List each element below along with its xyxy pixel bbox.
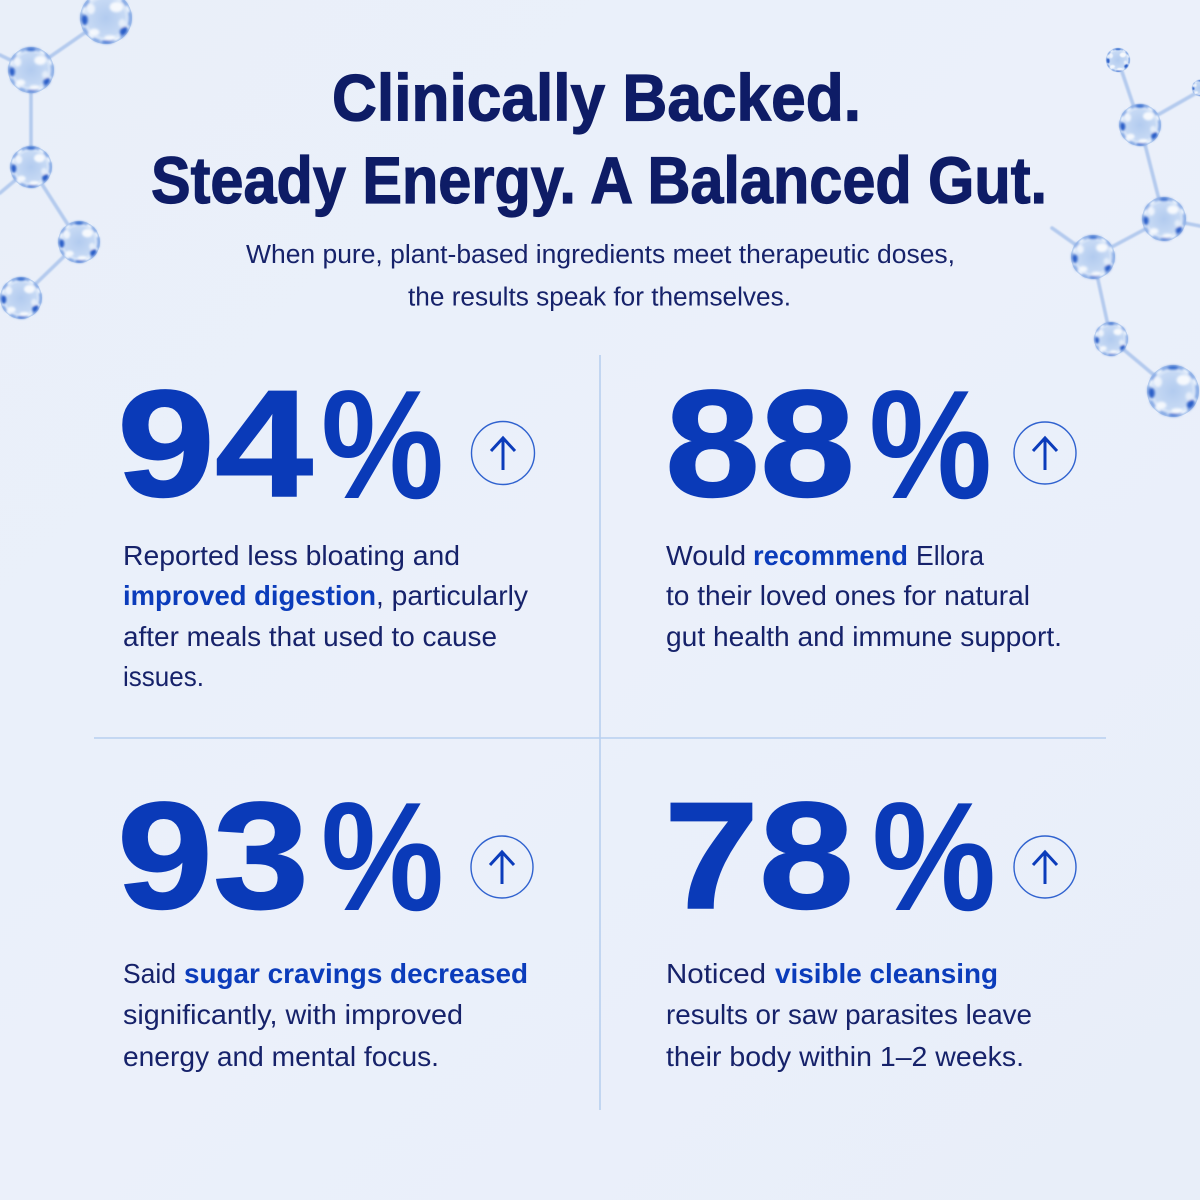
icon: up arrow bbox=[1014, 836, 1076, 898]
description: Would bbox=[666, 540, 746, 571]
description: Noticed bbox=[666, 958, 766, 989]
description: recommend bbox=[753, 540, 908, 571]
vertical divider bbox=[599, 355, 601, 1110]
description: after meals that used to cause bbox=[123, 621, 497, 652]
stat number bbox=[117, 770, 444, 943]
stat number bbox=[664, 770, 996, 943]
description bbox=[666, 958, 1032, 1072]
description bbox=[666, 540, 1062, 652]
title: Clinically Backed. bbox=[332, 60, 861, 134]
subtitle: When pure, plant-based ingredients meet therapeutic doses, bbox=[246, 241, 955, 269]
icon: molecule top left bbox=[0, 0, 132, 319]
icon: up arrow bbox=[471, 836, 533, 898]
stat number: 88 bbox=[665, 359, 855, 529]
stat number bbox=[117, 358, 444, 531]
stat number: 93 bbox=[117, 771, 309, 941]
title bbox=[151, 60, 1047, 217]
description: significantly, with improved bbox=[123, 999, 463, 1030]
description: visible cleansing bbox=[775, 958, 998, 989]
stat number: % bbox=[872, 770, 996, 943]
description: their body within 1–2 weeks. bbox=[666, 1041, 1024, 1072]
icon: up arrow bbox=[1014, 422, 1076, 484]
horizontal divider bbox=[94, 737, 1106, 739]
stat number: % bbox=[869, 358, 992, 531]
description: energy and mental focus. bbox=[123, 1041, 439, 1072]
description: to their loved ones for natural bbox=[666, 580, 1030, 611]
stat number: % bbox=[321, 770, 444, 943]
subtitle bbox=[246, 241, 955, 312]
title: Steady Energy. A Balanced Gut. bbox=[151, 143, 1047, 217]
description: issues. bbox=[123, 661, 204, 692]
stat number: % bbox=[321, 358, 444, 531]
description: sugar cravings decreased bbox=[184, 958, 528, 989]
panel: 94 percent stat bbox=[117, 358, 534, 692]
description: Reported less bloating and bbox=[123, 540, 460, 571]
description: , particularly bbox=[376, 580, 528, 611]
panel: 93 percent stat bbox=[117, 770, 533, 1072]
description: Said bbox=[123, 958, 176, 989]
description: improved digestion bbox=[123, 580, 376, 611]
stat number: 94 bbox=[117, 359, 313, 529]
stat number: 78 bbox=[664, 771, 854, 941]
icon: up arrow bbox=[472, 422, 534, 484]
description bbox=[123, 958, 528, 1072]
subtitle: the results speak for themselves. bbox=[408, 284, 791, 312]
description: gut health and immune support. bbox=[666, 621, 1062, 652]
panel: 88 percent stat bbox=[665, 358, 1076, 652]
icon: molecule right bbox=[1052, 48, 1200, 417]
panel: 78 percent stat bbox=[664, 770, 1076, 1072]
description bbox=[123, 540, 528, 692]
description: results or saw parasites leave bbox=[666, 999, 1032, 1030]
stat number bbox=[665, 358, 992, 531]
description: Ellora bbox=[916, 540, 985, 571]
